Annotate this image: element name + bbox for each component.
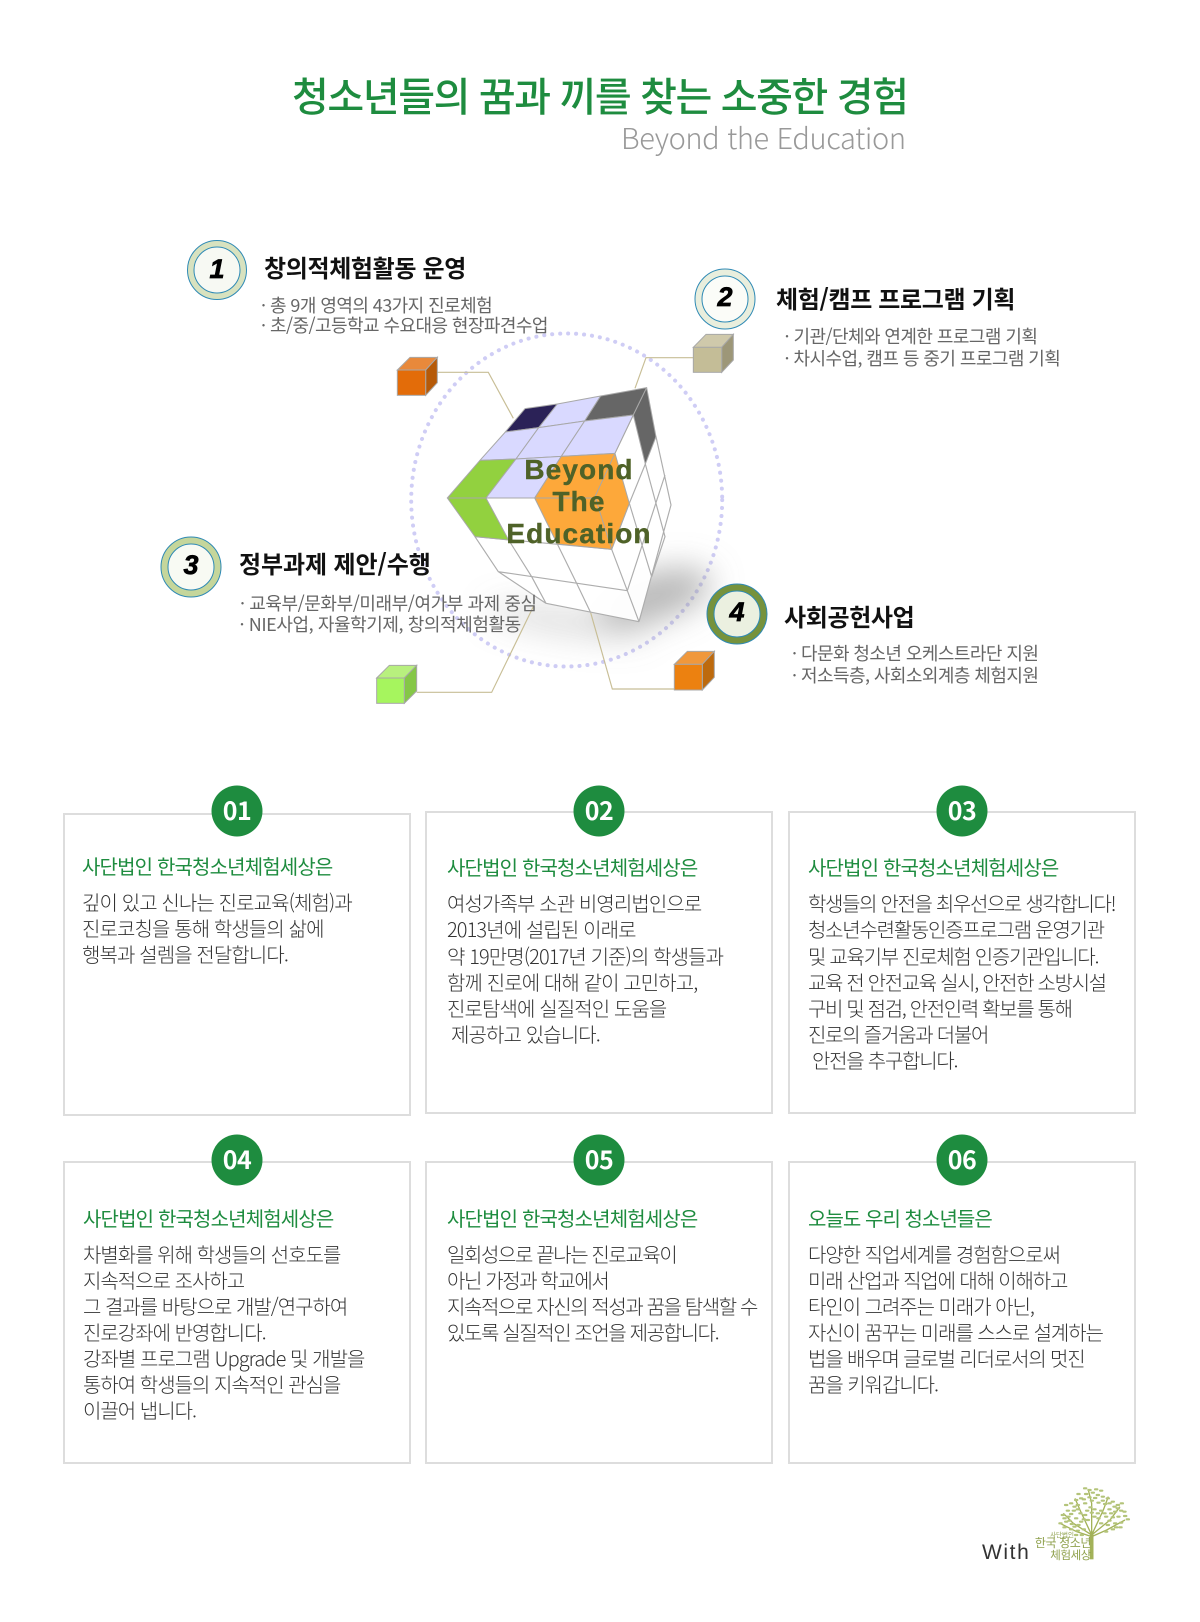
logo wordmark <box>1035 1529 1092 1563</box>
card 03 text: 구비 및 점검, 안전인력 확보를 통해 <box>808 993 1072 1022</box>
item 1: creative experience activities <box>188 240 548 338</box>
panel: card 06 <box>789 1134 1135 1463</box>
connector lines <box>417 358 693 692</box>
card 06 text <box>808 1239 1103 1398</box>
card 03 heading: 사단법인 한국청소년체험세상은 <box>808 852 1059 881</box>
number badge 04: 04 <box>223 1141 252 1177</box>
card 06 text: 타인이 그려주는 미래가 아닌, <box>808 1291 1034 1320</box>
item 3: government projects <box>161 537 537 637</box>
logo wordmark: 체험세상 <box>1050 1547 1092 1563</box>
panel: card 02 <box>426 786 772 1113</box>
card 01 text: 행복과 설렘을 전달합니다. <box>82 939 288 968</box>
number badge 02: 02 <box>585 792 613 828</box>
card 03 text: 학생들의 안전을 최우선으로 생각합니다! <box>808 888 1115 917</box>
logo wordmark: 한국 청소년 <box>1035 1534 1091 1551</box>
card 02 text: 약 19만명(2017년 기준)의 학생들과 <box>447 941 724 970</box>
number badge 03 <box>936 786 988 836</box>
number badge 03: 03 <box>948 792 976 828</box>
card 03 text <box>808 888 1115 1074</box>
badge 3 <box>161 537 221 597</box>
card 02 text: 진로탐색에 실질적인 도움을 <box>447 993 667 1022</box>
number badge 04 <box>212 1134 262 1186</box>
card 02 text: 2013년에 설립된 이래로 <box>447 914 636 943</box>
card 04 text: 그 결과를 바탕으로 개발/연구하여 <box>83 1291 347 1320</box>
description 3 <box>240 590 537 637</box>
card 03 text: 및 교육기부 진로체험 인증기관입니다. <box>808 941 1098 970</box>
number badge 02 <box>574 786 624 836</box>
cube shadow <box>485 557 717 646</box>
card 02 text <box>447 888 724 1048</box>
card 03 text: 안전을 추구합니다. <box>812 1045 958 1074</box>
badge 2: 2 <box>716 282 733 312</box>
badge 4 <box>707 584 767 644</box>
card 03 text: 청소년수련활동인증프로그램 운영기관 <box>808 914 1105 943</box>
card 01 text: 진로코칭을 통해 학생들의 삶에 <box>82 913 324 942</box>
badge 3: 3 <box>183 550 199 580</box>
cube label: The <box>552 486 606 517</box>
description 4: · 저소득층, 사회소외계층 체험지원 <box>792 662 1038 688</box>
footer logo: with + tree <box>982 1488 1129 1564</box>
heading 4: 사회공헌사업 <box>784 598 914 633</box>
card 05 text: 지속적으로 자신의 적성과 꿈을 탐색할 수 <box>447 1291 758 1320</box>
description 1: · 초/중/고등학교 수요대응 현장파견수업 <box>261 312 548 338</box>
heading 3: 정부과제 제안/수행 <box>239 545 431 580</box>
description 4: · 다문화 청소년 오케스트라단 지원 <box>792 640 1038 666</box>
card 06 text: 법을 배우며 글로벌 리더로서의 멋진 <box>808 1343 1085 1372</box>
number badge 06: 06 <box>948 1141 976 1177</box>
description 2: · 차시수업, 캠프 등 중기 프로그램 기획 <box>784 345 1060 371</box>
card 06 heading: 오늘도 우리 청소년들은 <box>808 1203 992 1232</box>
panel: card 01 <box>64 786 410 1115</box>
cube label <box>506 454 652 549</box>
with label: With <box>982 1541 1030 1564</box>
card 04 text: 진로강좌에 반영합니다. <box>83 1317 266 1346</box>
description 1: · 총 9개 영역의 43가지 진로체험 <box>261 292 492 318</box>
logo wordmark: 사단법인 <box>1050 1529 1074 1539</box>
badge 1: 1 <box>209 254 225 284</box>
panel: card 05 <box>426 1134 772 1463</box>
card 01 text: 깊이 있고 신나는 진로교육(체험)과 <box>82 887 352 916</box>
description 3: · NIE사업, 자율학기제, 창의적체험활동 <box>240 611 521 637</box>
heading 1: 창의적체험활동 운영 <box>264 249 466 284</box>
card 01 text <box>82 887 352 968</box>
cube 4 orange <box>674 651 714 690</box>
card 01 heading: 사단법인 한국청소년체험세상은 <box>82 851 333 880</box>
card 03 text: 진로의 즐거움과 더불어 <box>808 1019 988 1048</box>
cube label: Education <box>506 518 652 549</box>
description 3: · 교육부/문화부/미래부/여가부 과제 중심 <box>240 590 537 616</box>
subtitle: Beyond the Education <box>621 116 906 158</box>
card 06 text: 자신이 꿈꾸는 미래를 스스로 설계하는 <box>808 1317 1103 1346</box>
card 04 text <box>83 1239 365 1424</box>
card 02 text: 함께 진로에 대해 같이 고민하고, <box>447 967 697 996</box>
card 05 text: 있도록 실질적인 조언을 제공합니다. <box>447 1317 719 1346</box>
card 04 text: 지속적으로 조사하고 <box>83 1265 245 1294</box>
item 2: program planning <box>695 269 1060 371</box>
description 1 <box>261 292 548 338</box>
central diagram: dotted ring, cube, connectors <box>377 334 733 703</box>
panel: card 03 <box>789 786 1135 1113</box>
item 4: social contribution <box>707 584 1038 688</box>
card 06 text: 꿈을 키워갑니다. <box>808 1369 938 1398</box>
cube label: Beyond <box>524 454 634 485</box>
number badge 05 <box>574 1134 624 1186</box>
dotted ring <box>411 334 722 666</box>
card 06 text: 다양한 직업세계를 경험함으로써 <box>808 1239 1060 1268</box>
rubik cube <box>447 388 671 622</box>
heading 2: 체험/캠프 프로그램 기획 <box>776 280 1015 315</box>
number badge 05: 05 <box>585 1141 613 1177</box>
card 05 text: 아닌 가정과 학교에서 <box>447 1265 608 1294</box>
card 04 heading: 사단법인 한국청소년체험세상은 <box>83 1203 334 1232</box>
card 05 text: 일회성으로 끝나는 진로교육이 <box>447 1239 676 1268</box>
icon: tree <box>1059 1488 1129 1559</box>
badge 2 <box>695 269 755 329</box>
badge 1 <box>188 240 246 300</box>
card 06 text: 미래 산업과 직업에 대해 이해하고 <box>808 1265 1068 1294</box>
card 04 text: 강좌별 프로그램 Upgrade 및 개발을 <box>83 1343 365 1372</box>
card 02 text: 제공하고 있습니다. <box>451 1019 600 1048</box>
card 02 text: 여성가족부 소관 비영리법인으로 <box>447 888 702 917</box>
card 03 text: 교육 전 안전교육 실시, 안전한 소방시설 <box>808 967 1106 996</box>
description 4 <box>792 640 1038 688</box>
card 04 text: 통하여 학생들의 지속적인 관심을 <box>83 1369 341 1398</box>
badge 4: 4 <box>728 597 745 627</box>
card 05 text <box>447 1239 758 1346</box>
panel: card 04 <box>64 1134 410 1463</box>
cube 1 orange <box>397 357 437 395</box>
cube 3 green <box>377 665 417 703</box>
card 02 heading: 사단법인 한국청소년체험세상은 <box>447 852 698 881</box>
description 2 <box>784 323 1060 371</box>
title: 청소년들의 꿈과 끼를 찾는 소중한 경험 <box>292 65 909 123</box>
number badge 01 <box>212 786 262 836</box>
card 04 text: 이끌어 냅니다. <box>83 1395 196 1424</box>
card 04 text: 차별화를 위해 학생들의 선호도를 <box>83 1239 341 1268</box>
card 05 heading: 사단법인 한국청소년체험세상은 <box>447 1203 698 1232</box>
description 2: · 기관/단체와 연계한 프로그램 기획 <box>784 323 1037 349</box>
cube 2 tan <box>693 334 733 372</box>
number badge 06 <box>936 1134 988 1186</box>
number badge 01: 01 <box>223 792 251 828</box>
